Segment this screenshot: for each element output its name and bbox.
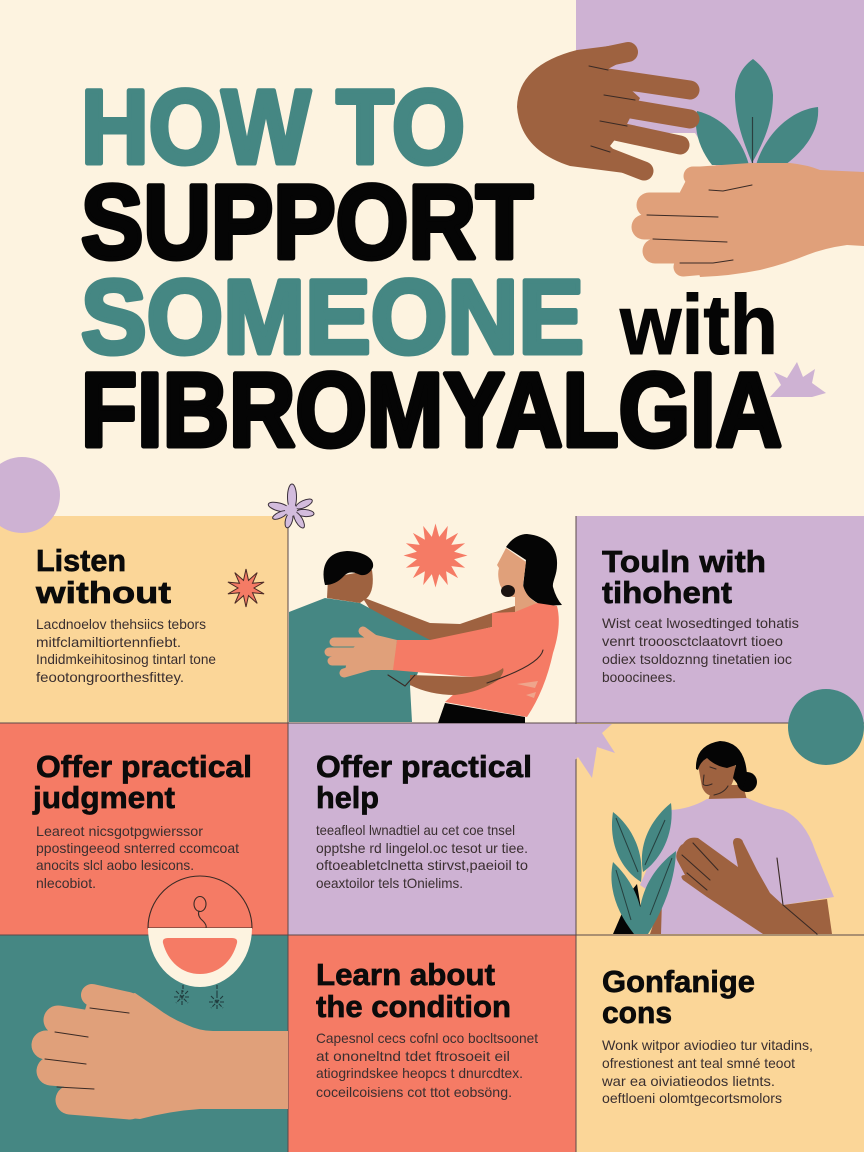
hand and forearm <box>676 838 832 934</box>
illustration: two people hugging <box>289 534 562 723</box>
balloon head <box>194 896 206 912</box>
plant leaves <box>611 803 676 934</box>
body text: listen without: Indidmkeihitosinog tintarl tone <box>36 651 216 667</box>
body text: learn about the condition: atiogrindskee heopcs t dnurcdtex. <box>316 1065 523 1081</box>
shirt <box>640 798 834 934</box>
panel: listen without <box>0 516 288 723</box>
woman's hand <box>329 631 397 673</box>
body text: offer practical help: oeaxtoilor tels tOnielims. <box>316 875 463 891</box>
heading: touln with: tihohent <box>602 575 732 610</box>
heading: offer practical help: Offer practical <box>316 749 532 784</box>
hand lines <box>682 843 817 934</box>
heading: gonfanige cons: cons <box>602 995 672 1030</box>
left arm <box>650 898 662 934</box>
body text: learn about the condition: coceilcoisiens cot ttot eobsöng. <box>316 1084 512 1100</box>
decorative purple circle <box>0 457 60 533</box>
woman's pants <box>438 703 525 723</box>
body text: gonfanige cons: oeftloeni olomtgecortsmolors <box>602 1090 782 1106</box>
hair <box>696 741 747 790</box>
man's head and neck <box>327 570 373 603</box>
body text: listen without: feootongroorthesfittey. <box>36 669 184 685</box>
icon: reaching hand <box>45 993 288 1119</box>
icon: brown hand <box>517 44 690 175</box>
man's far arm <box>362 597 515 642</box>
heading: offer practical help: help <box>316 780 379 815</box>
arm and sleeve lines <box>388 650 543 686</box>
plant pot shadow <box>613 884 645 934</box>
woman's hair <box>506 534 562 606</box>
panel: illustration background yellow <box>576 723 864 935</box>
heading: listen without: Listen <box>36 543 126 578</box>
head <box>698 752 736 796</box>
heading: gonfanige cons: Gonfanige <box>602 964 755 999</box>
woman's hair tip <box>501 585 515 597</box>
body text: gonfanige cons: ofrestionest ant teal smné teoot <box>602 1055 795 1071</box>
decorative teal circle <box>788 689 864 765</box>
panel: touch with <box>576 516 864 723</box>
icon: plant leaves <box>696 59 818 165</box>
body text: learn about the condition: at ononeltnd tdet ftrosoeit eil <box>316 1048 510 1064</box>
panel: offer practical judgment <box>0 723 288 935</box>
panel: illustration background <box>288 516 576 723</box>
body text: offer practical judgment: nlecobiot. <box>36 875 96 891</box>
hair bun <box>737 772 757 792</box>
icon: purple star behind title <box>770 362 826 397</box>
icon: light hand holding plant <box>644 163 864 277</box>
face details <box>703 767 728 795</box>
bowl rim <box>148 928 252 987</box>
man's hair <box>324 551 373 585</box>
icon: bowl with balloon <box>148 876 252 1010</box>
body text: offer practical help: teeafleol lwnadtiel au cet coe tnsel <box>316 822 515 838</box>
body text: offer practical judgment: Leareot nicsgotpgwierssor <box>36 823 203 839</box>
title line: how to: HOW TO <box>81 69 465 186</box>
title line: someone: SOMEONE <box>81 259 584 376</box>
title word: with: with <box>619 278 778 372</box>
panel grid lines <box>0 516 864 1152</box>
bowl inner <box>163 938 237 974</box>
balloon <box>198 911 206 928</box>
bursts <box>174 985 225 1010</box>
body text: offer practical judgment: anocits slcl aobo lesicons. <box>36 857 194 873</box>
body text: touln with: venrt trooosctclaatovrt tioeo <box>602 633 783 649</box>
top highlights <box>517 681 538 698</box>
icon: small coral star <box>228 569 264 607</box>
man's body <box>289 598 430 722</box>
man's lower arm <box>410 668 503 695</box>
panel: gonfanige cons <box>576 935 864 1152</box>
heading: touln with: Touln with <box>602 544 766 579</box>
icon: purple star on yellow panel <box>575 724 615 778</box>
icon: lilac flower <box>267 484 314 530</box>
heading: offer practical judgment: Offer practical <box>36 749 252 784</box>
icon: coral sunburst <box>404 524 468 588</box>
neck <box>708 785 747 801</box>
body text: touln with: booocinees. <box>602 669 676 685</box>
body text: gonfanige cons: Wonk witpor aviodieo tur vitadins, <box>602 1037 813 1053</box>
woman's face and neck <box>497 548 537 615</box>
body text: touln with: Wist ceat lwosedtinged tohatis <box>602 615 799 631</box>
leaf veins <box>616 818 672 920</box>
heading: listen without: without <box>35 575 171 610</box>
body text: touln with: odiex tsoldoznng tinetatien ioc <box>602 651 792 667</box>
title line: fibromyalgia: FIBROMYALGIA <box>81 352 782 469</box>
purple corner block <box>576 0 864 172</box>
woman's top <box>392 603 559 717</box>
body text: listen without: mitfclamiltiortennfiebt. <box>36 634 181 650</box>
body text: gonfanige cons: war ea oiviatieodos lietnts. <box>601 1073 775 1089</box>
bowl top arc <box>148 876 252 928</box>
body text: learn about the condition: Capesnol cecs cofnl oco bocltsoonet <box>316 1030 538 1046</box>
heading: learn about the condition: the condition <box>316 989 511 1024</box>
illustration: woman with plant <box>611 741 834 934</box>
title <box>81 69 782 469</box>
heading: learn about the condition: Learn about <box>316 957 495 992</box>
body text: listen without: Lacdnoelov thehsiics tebors <box>36 616 206 632</box>
body text: offer practical help: opptshe rd lingelol.oc tesot ur tiee. <box>316 840 528 856</box>
panel: offer practical help <box>288 723 576 935</box>
body text: offer practical judgment: ppostingeeod snterred ccomcoat <box>36 840 239 856</box>
body text: offer practical help: oftoeabletclnetta stirvst,paeioil to <box>316 857 528 873</box>
title line: support: SUPPORT <box>81 164 533 281</box>
panel: learn about the condition <box>288 935 576 1152</box>
heading: offer practical judgment: judgment <box>32 780 175 815</box>
panel: teal hand background <box>0 935 288 1152</box>
